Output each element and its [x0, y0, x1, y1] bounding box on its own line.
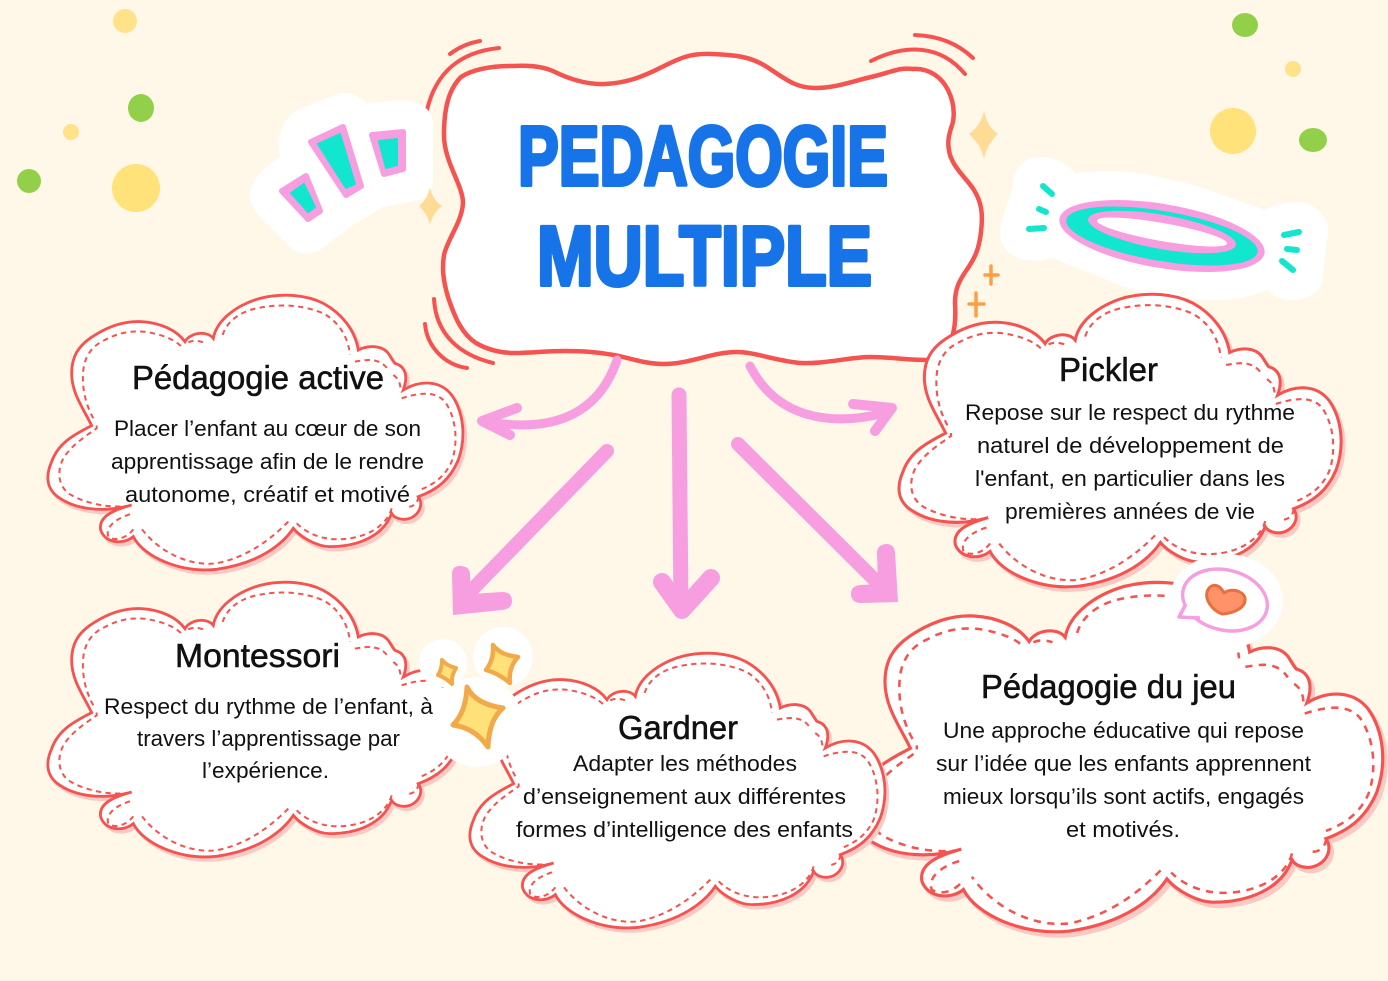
- heading: Pickler: Pickler: [1059, 351, 1158, 388]
- swoosh lines around title: [425, 35, 973, 368]
- sparkle: left of title: [419, 187, 442, 225]
- icon: orange plus signs: [969, 266, 998, 316]
- panel: Pickler: [899, 294, 1344, 590]
- title: [518, 109, 888, 303]
- text block: Pédagogie active: Placer l’enfant au cœur de son: [114, 416, 421, 441]
- text block: Pédagogie du jeu: mieux lorsqu’ils sont actifs, engagés: [943, 784, 1304, 809]
- text block: Pédagogie du jeu: et motivés.: [1066, 817, 1180, 842]
- text block: Pédagogie active: [111, 416, 424, 507]
- title frame: [443, 54, 982, 364]
- text block: Pickler: l'enfant, en particulier dans les: [975, 466, 1285, 491]
- text block: Pickler: naturel de développement de: [977, 433, 1284, 458]
- icon: yellow sparkles sticker: [419, 627, 533, 767]
- sticker: teal and pink ring: [1000, 157, 1328, 300]
- decorative dots: top right: [1210, 13, 1327, 154]
- text block: Pédagogie du jeu: [936, 718, 1311, 842]
- icon: speech bubble with heart: [1169, 554, 1283, 648]
- sticker: teal and pink trapezoids: [250, 93, 433, 254]
- text block: Pédagogie active: autonome, créatif et motivé: [125, 482, 410, 507]
- heading: Pédagogie du jeu: Pédagogie du jeu: [981, 668, 1236, 705]
- text block: Pédagogie du jeu: Une approche éducative qui repose: [943, 718, 1304, 743]
- text block: Montessori: l’expérience.: [202, 758, 329, 783]
- text block: Montessori: [104, 694, 434, 783]
- text block: Gardner: d’enseignement aux différentes: [523, 784, 846, 809]
- text block: Montessori: travers l’apprentissage par: [137, 726, 400, 751]
- text block: Gardner: formes d’intelligence des enfants: [516, 817, 853, 842]
- text block: Gardner: [516, 751, 853, 842]
- heading: Pédagogie active: Pédagogie active: [132, 359, 384, 396]
- arrow: down to Gardner: [662, 395, 711, 610]
- heading: Montessori: Montessori: [175, 637, 340, 674]
- panel: Pédagogie active: [48, 295, 466, 573]
- panel: Gardner: [470, 653, 888, 931]
- text block: Pickler: [965, 400, 1295, 524]
- text block: Pickler: Repose sur le respect du rythme: [965, 400, 1295, 425]
- heading: Gardner: Gardner: [618, 709, 738, 746]
- arrow: diagonal to Pédagogie du jeu: [738, 444, 898, 603]
- text block: Pédagogie du jeu: sur l’idée que les enfants apprennent: [936, 751, 1311, 776]
- panel: Pédagogie du jeu: [855, 582, 1386, 936]
- arrow: diagonal to Montessori: [452, 451, 607, 615]
- text block: Gardner: Adapter les méthodes: [573, 751, 797, 776]
- decorative dots: top left: [17, 9, 160, 212]
- title: MULTIPLE: [537, 209, 872, 303]
- text block: Pickler: premières années de vie: [1005, 499, 1255, 524]
- text block: Montessori: Respect du rythme de l’enfant, à: [104, 694, 434, 719]
- title: PEDAGOGIE: [518, 109, 888, 203]
- arrow: curved to Pickler: [750, 366, 892, 431]
- sparkle: right of title: [969, 110, 998, 159]
- panel: Montessori: [48, 582, 466, 860]
- text block: Pédagogie active: apprentissage afin de le rendre: [111, 449, 424, 474]
- arrow: curved to Pédagogie active: [482, 360, 617, 435]
